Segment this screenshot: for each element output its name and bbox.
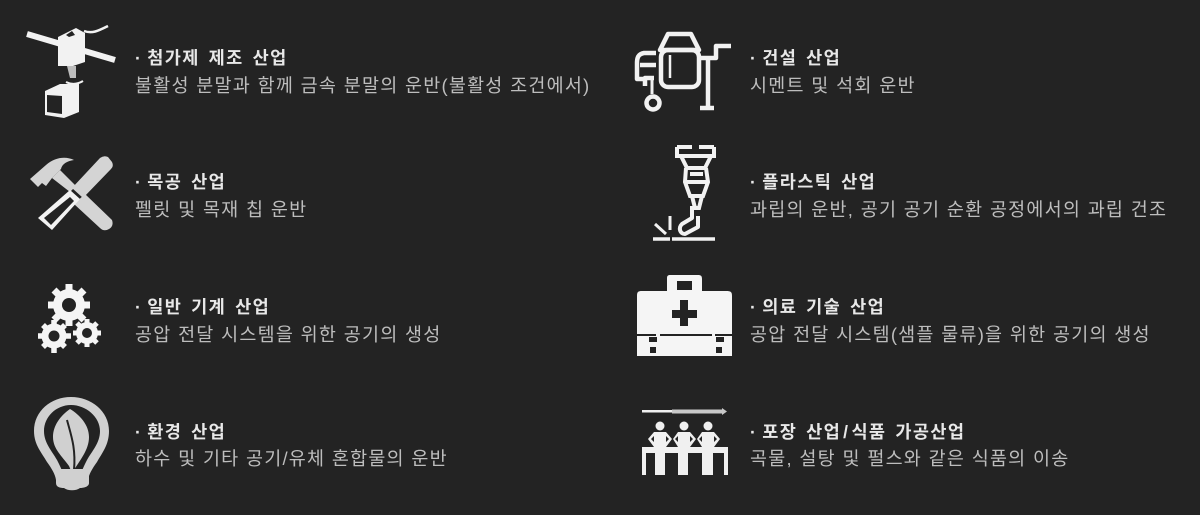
icon: packaging workers and conveyor <box>642 408 728 475</box>
icon: hammer and chisel <box>30 156 113 230</box>
heading: medical technology: · 의료 기술 산업 <box>750 297 885 317</box>
icon: additive manufacturing print head <box>27 26 115 118</box>
heading: construction: · 건설 산업 <box>750 48 841 68</box>
icon: gears <box>38 284 101 353</box>
text: packaging and food description: 곡물, 설탕 및 펄스와 같은 식품의 이송 <box>750 448 1069 469</box>
text: additive manufacturing description: 불활성 분말과 함께 금속 분말의 운반(불활성 조건에서) <box>135 75 590 96</box>
icon: medical case <box>637 275 732 356</box>
text: environment description: 하수 및 기타 공기/유체 혼합물의 운반 <box>135 448 448 469</box>
text: medical technology description: 공압 전달 시스템(샘플 물류)을 위한 공기의 생성 <box>750 324 1151 345</box>
text: plastics description: 과립의 운반, 공기 공기 순환 공정에서의 과립 건조 <box>750 199 1167 220</box>
heading: additive manufacturing: · 첨가제 제조 산업 <box>135 48 288 68</box>
icon: plastic extruder nozzle <box>653 147 715 239</box>
text: construction description: 시멘트 및 석회 운반 <box>750 75 916 96</box>
heading: general machinery: · 일반 기계 산업 <box>135 297 270 317</box>
icon: light bulb with leaf <box>34 397 109 490</box>
text: general machinery description: 공압 전달 시스템을 위한 공기의 생성 <box>135 324 442 345</box>
heading: environment: · 환경 산업 <box>135 422 226 442</box>
heading: plastics: · 플라스틱 산업 <box>750 172 876 192</box>
text: woodworking description: 펠릿 및 목재 칩 운반 <box>135 199 307 220</box>
icon: concrete mixer <box>637 34 731 110</box>
heading: woodworking: · 목공 산업 <box>135 172 226 192</box>
heading: packaging and food processing: · 포장 산업/식품 가공산업 <box>750 422 965 442</box>
